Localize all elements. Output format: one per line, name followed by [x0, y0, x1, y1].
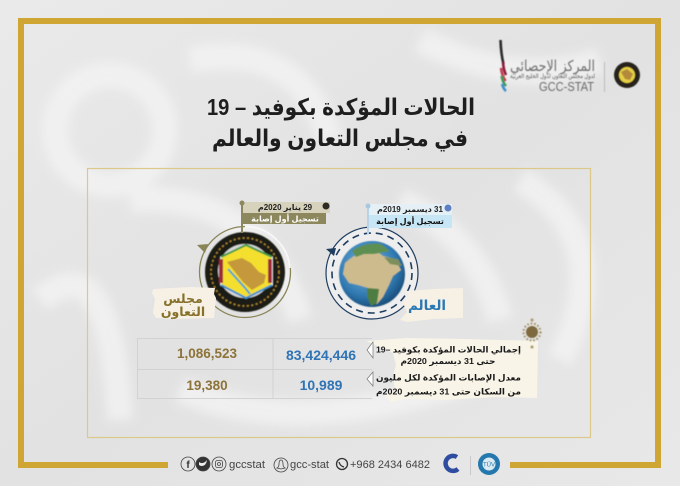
- icon: virus: [524, 318, 540, 348]
- social icons: [181, 457, 226, 471]
- title: [207, 94, 475, 152]
- date flag: GCC: 29 يناير 2020م: [258, 203, 313, 212]
- logo emblem: [614, 62, 640, 88]
- logo GCC-STAT: GCC-STAT: [539, 80, 594, 94]
- value: GCC rate: 19,380: [186, 378, 228, 393]
- logo ribbon: [500, 40, 506, 91]
- value: world rate: 10,989: [300, 377, 343, 393]
- value: world total: 83,424,446: [286, 347, 356, 363]
- handle: gccstat: gccstat: [229, 459, 265, 471]
- date flag: world: [366, 204, 452, 234]
- GCC section: [152, 200, 330, 319]
- label: GCC: [152, 287, 216, 319]
- arrow: row 1: [367, 342, 373, 358]
- note: rate per million: معدل الإصابات المؤكدة لكل مليون: [376, 372, 521, 384]
- icon: whatsapp: [336, 458, 348, 470]
- logo Arabic name: المركز الإحصائي: [510, 58, 595, 76]
- label: GCC: التعاون: [161, 305, 205, 319]
- GCC emblem: [205, 232, 285, 312]
- phone number: +968 2434 6482: [350, 459, 430, 471]
- date flag: world: 31 ديسمبر 2019م: [377, 205, 443, 214]
- label: world: العالم: [408, 298, 446, 313]
- label: GCC: مجلس: [163, 292, 203, 306]
- table grid: [137, 338, 372, 399]
- note: rate per million: [376, 372, 521, 398]
- note: rate per million: من السكان حتى 31 ديسمبر 2020م: [376, 386, 521, 398]
- date flag: GCC: [240, 200, 330, 233]
- data table: [137, 338, 372, 399]
- date flag: GCC: تسجيل أول إصابة: [251, 214, 319, 224]
- title: الحالات المؤكدة بكوفيد – 19: [207, 94, 475, 121]
- icon: facebook: f: [186, 460, 190, 471]
- icon: instagram: [212, 457, 226, 471]
- note: total cases: إجمالي الحالات المؤكدة بكوفيد –19: [376, 344, 521, 356]
- icon: TUV badge: [478, 453, 500, 475]
- note: total cases: حتى 31 ديسمبر 2020م: [400, 356, 495, 367]
- icon: twitter: [196, 457, 210, 471]
- handle: gcc-stat: gcc-stat: [290, 459, 329, 471]
- inner content frame: [88, 168, 590, 438]
- icon: TUV badge: TÜV: [483, 462, 495, 468]
- globe: [339, 241, 405, 307]
- arrow: row 2: [367, 372, 373, 386]
- paper note labels: [366, 338, 538, 402]
- icon: snapchat: [274, 458, 288, 472]
- ring arrow: world: [326, 227, 418, 319]
- logo subtitle: لدول مجلس التعاون لدول الخليج العربية: [510, 73, 595, 80]
- icon: certification G: [446, 456, 458, 471]
- date flag: world: تسجيل أول إصابة: [376, 216, 444, 226]
- note: total cases: [376, 344, 521, 367]
- title: في مجلس التعاون والعالم: [212, 125, 468, 152]
- world section: [326, 204, 463, 322]
- GCC-STAT logo: [500, 40, 640, 94]
- footer contact bar: [181, 453, 500, 475]
- value: GCC total: 1,086,523: [177, 346, 238, 361]
- ring arrow: GCC: [197, 226, 290, 318]
